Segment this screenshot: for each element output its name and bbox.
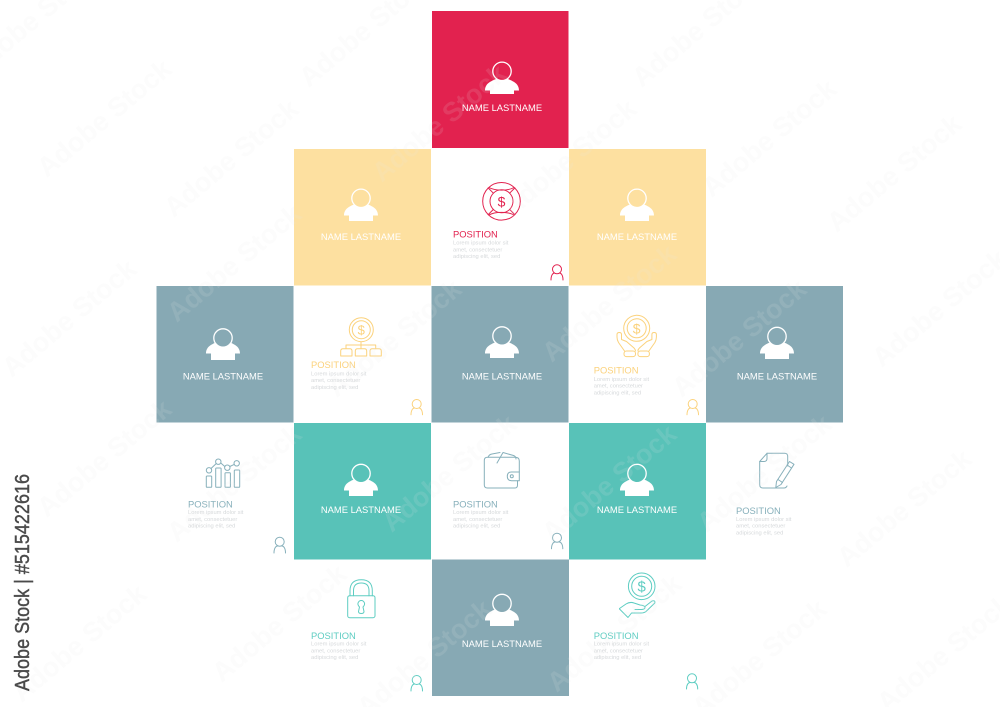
- icon: small slate person left: [274, 537, 286, 553]
- panel: cream left name card: [294, 149, 431, 286]
- icon: globe with dollar: $: [498, 194, 506, 210]
- watermark pattern: Adobe Stock: [6, 578, 153, 707]
- watermark pattern: Adobe Stock: [666, 273, 813, 403]
- panel: slate left name card: NAME LASTNAME: [183, 370, 263, 382]
- icon: small red person: [551, 265, 563, 280]
- watermark pattern: Adobe Stock: [161, 198, 308, 328]
- text block: slate centre position: POSITION: [453, 498, 498, 510]
- text block: slate left position: Lorem ipsum dolor sit: [188, 510, 244, 516]
- text block: cream left position: Lorem ipsum dolor sit: [311, 372, 367, 378]
- watermark pattern: Adobe Stock: [496, 93, 643, 223]
- text block: cream right position: adipiscing elit, sed: [594, 390, 641, 396]
- text block: red position: [453, 228, 509, 260]
- watermark pattern: Adobe Stock: [376, 408, 523, 538]
- watermark pattern: Adobe Stock: [321, 273, 468, 403]
- panel: red top name card: [432, 11, 568, 148]
- watermark pattern: Adobe Stock: [0, 253, 143, 383]
- text block: red position: POSITION: [453, 228, 498, 240]
- text block: cream left position: amet, consectetuer: [311, 378, 360, 384]
- watermark pattern: Adobe Stock: [831, 443, 978, 573]
- text block: slate centre position: amet, consectetuer: [453, 517, 502, 523]
- icon: padlock: [348, 580, 375, 618]
- icon: hands holding coin: [617, 315, 656, 357]
- text block: teal left position: adipiscing elit, sed: [311, 655, 358, 661]
- icon: dollar hierarchy: $: [358, 322, 366, 338]
- watermark pattern: Adobe Stock: [31, 53, 178, 183]
- watermark pattern: Adobe Stock: [206, 558, 353, 688]
- icon: small teal person left: [411, 676, 422, 691]
- text block: cream right position: [594, 364, 650, 396]
- text block: slate right position: [736, 505, 792, 536]
- stock id side label: Adobe Stock | #515422616: [12, 474, 34, 691]
- panel: slate left name card: [156, 286, 294, 422]
- icon: small cream person right: [687, 400, 698, 415]
- panel: teal left name card: [294, 423, 431, 560]
- text block: slate centre position: Lorem ipsum dolor sit: [453, 510, 509, 516]
- watermark pattern: Adobe Stock: [691, 408, 838, 538]
- text block: cream right position: amet, consectetuer: [594, 384, 643, 390]
- icon: document and pen: [760, 453, 794, 488]
- icon: small cream person left: [411, 400, 422, 415]
- watermark pattern: Adobe Stock: [536, 418, 683, 548]
- text block: teal right position: Lorem ipsum dolor sit: [594, 642, 650, 648]
- text block: cream left position: adipiscing elit, sed: [311, 385, 358, 391]
- text block: teal left position: amet, consectetuer: [311, 648, 360, 654]
- text block: red position: adipiscing elit, sed: [453, 254, 500, 260]
- panel: teal right name card: NAME LASTNAME: [597, 504, 677, 515]
- text block: slate left position: POSITION: [188, 498, 233, 510]
- panel: cream right name card: [569, 149, 706, 286]
- watermark pattern: Adobe Stock: [366, 58, 513, 188]
- text block: cream right position: POSITION: [594, 364, 638, 376]
- icon: hand with coin: [620, 573, 655, 618]
- panel: teal right name card: [569, 423, 706, 560]
- icon: small slate person centre: [552, 533, 563, 549]
- text block: teal left position: POSITION: [311, 630, 356, 641]
- text block: teal left position: Lorem ipsum dolor sit: [311, 642, 367, 648]
- text block: cream right position: Lorem ipsum dolor sit: [594, 377, 650, 383]
- text block: teal right position: POSITION: [594, 630, 638, 641]
- panel: slate centre name card: [432, 286, 568, 422]
- text block: slate right position: POSITION: [736, 505, 781, 516]
- icon: globe with dollar: [483, 182, 520, 220]
- panel: slate bottom name card: [432, 560, 569, 696]
- panel: slate right name card: [706, 286, 843, 422]
- text block: slate right position: Lorem ipsum dolor sit: [736, 517, 792, 523]
- text block: slate right position: amet, consectetuer: [736, 524, 785, 530]
- watermark pattern: Adobe Stock: [158, 93, 305, 223]
- panel: red top name card: NAME LASTNAME: [462, 102, 542, 113]
- text block: teal right position: amet, consectetuer: [594, 648, 643, 654]
- watermark pattern: Adobe Stock: [821, 108, 968, 238]
- icon: bar chart with line: [206, 459, 240, 487]
- watermark pattern: Adobe Stock: [536, 238, 683, 368]
- text block: teal right position: [594, 630, 650, 661]
- watermark pattern: Adobe Stock: [541, 568, 688, 698]
- icon: dollar hierarchy: [341, 318, 381, 356]
- text block: slate right position: adipiscing elit, sed: [736, 530, 783, 536]
- text block: slate centre position: adipiscing elit, sed: [453, 524, 500, 530]
- text block: teal left position: [311, 630, 367, 661]
- icon: wallet: [484, 452, 519, 488]
- icon: hand with coin: $: [638, 579, 647, 596]
- panel: slate bottom name card: NAME LASTNAME: [462, 638, 542, 649]
- panel: slate centre name card: NAME LASTNAME: [462, 370, 542, 382]
- watermark pattern: Adobe Stock: [161, 418, 308, 548]
- text block: red position: Lorem ipsum dolor sit: [453, 240, 509, 246]
- panel: cream right name card: NAME LASTNAME: [597, 231, 677, 242]
- icon: hands holding coin: $: [633, 320, 641, 336]
- text block: slate left position: [188, 498, 244, 530]
- text block: cream left position: POSITION: [311, 359, 356, 370]
- watermark pattern: Adobe Stock: [31, 393, 178, 523]
- text block: slate left position: amet, consectetuer: [188, 517, 237, 523]
- text block: slate left position: adipiscing elit, sed: [188, 524, 235, 530]
- panel: teal left name card: NAME LASTNAME: [321, 504, 401, 515]
- panel: cream left name card: NAME LASTNAME: [321, 231, 401, 242]
- panel: slate right name card: NAME LASTNAME: [737, 370, 817, 382]
- text block: cream left position: [311, 359, 367, 391]
- text block: teal right position: adipiscing elit, sed: [594, 655, 641, 661]
- watermark pattern: Adobe Stock: [696, 73, 843, 203]
- text block: slate centre position: [453, 498, 509, 530]
- icon: small teal person right: [686, 674, 698, 689]
- text block: red position: amet, consectetuer: [453, 247, 502, 253]
